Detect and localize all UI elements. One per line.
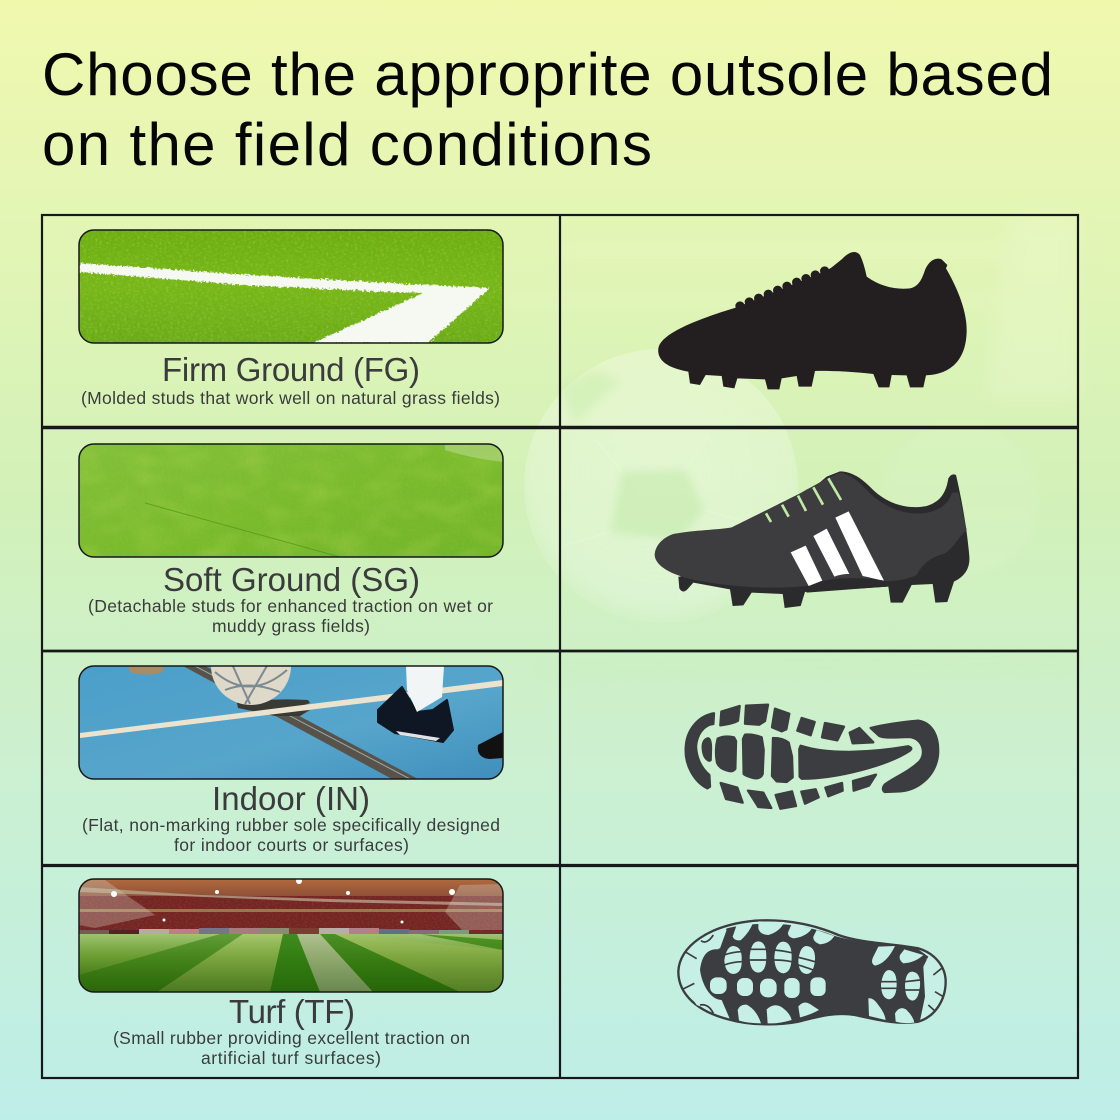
heading: indoor: Indoor (IN) xyxy=(212,780,370,817)
panel: soft ground xyxy=(79,444,969,636)
description: soft ground: (Detachable studs for enhanced traction on wet or xyxy=(88,596,493,616)
description: firm ground: (Molded studs that work well on natural grass fields) xyxy=(81,388,500,408)
panel: firm ground xyxy=(79,230,967,408)
description: soft ground: muddy grass fields) xyxy=(212,616,370,636)
icon: striped soft ground boot xyxy=(655,471,969,608)
icon: turf outsole xyxy=(678,920,946,1024)
description: turf: artificial turf surfaces) xyxy=(201,1048,381,1068)
heading: turf: Turf (TF) xyxy=(229,993,355,1030)
photo: floodlit stadium xyxy=(79,878,503,992)
title xyxy=(42,41,1053,178)
photo: grass pitch with white line xyxy=(79,230,503,343)
description: turf: (Small rubber providing excellent traction on xyxy=(113,1028,470,1048)
icon: indoor outsole xyxy=(686,705,938,809)
icon: black firm ground boot xyxy=(658,252,967,389)
description: indoor xyxy=(82,815,500,855)
title: Choose the approprite outsole based xyxy=(42,41,1053,108)
description: turf xyxy=(113,1028,470,1068)
description: indoor: for indoor courts or surfaces) xyxy=(174,835,409,855)
photo: indoor court with ball and shoes xyxy=(78,665,504,780)
heading: soft ground: Soft Ground (SG) xyxy=(163,561,420,598)
photo: smooth green turf xyxy=(79,444,503,557)
description: indoor: (Flat, non-marking rubber sole specifically designed xyxy=(82,815,500,835)
panel: turf xyxy=(79,878,946,1068)
title: on the field conditions xyxy=(42,111,652,178)
description: soft ground xyxy=(88,596,493,636)
heading: firm ground: Firm Ground (FG) xyxy=(162,351,420,388)
panel: indoor xyxy=(78,665,940,854)
comparison table grid xyxy=(42,215,1078,1078)
